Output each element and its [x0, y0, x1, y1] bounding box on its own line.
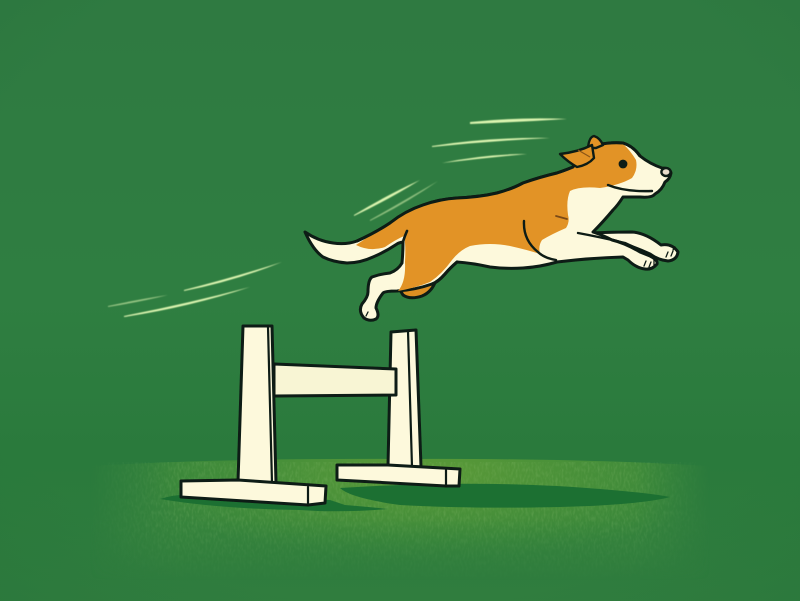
motion line	[354, 180, 420, 216]
illustration: dog jumping over agility hurdle	[108, 118, 682, 560]
hurdle	[181, 326, 460, 505]
motion line	[470, 118, 567, 124]
motion line	[184, 262, 282, 291]
dog: far hind leg	[400, 280, 436, 298]
ground: lit grass patch	[118, 458, 687, 560]
motion line	[108, 295, 168, 307]
dog: front ear	[560, 145, 594, 167]
hurdle: left post	[238, 326, 276, 483]
dog: belly outline	[432, 262, 457, 284]
dog: far front leg	[590, 232, 678, 261]
dog: eye	[619, 160, 627, 168]
dog: head outline	[590, 143, 640, 156]
dog: ear fold	[578, 150, 590, 157]
hurdle: right post	[388, 330, 421, 467]
dog: elbow line	[524, 221, 556, 260]
motion line	[124, 287, 250, 317]
dog: chest crease	[556, 216, 567, 219]
dog: foreleg crease	[578, 233, 650, 256]
motion line	[432, 138, 550, 147]
dog: mouth	[608, 185, 652, 191]
motion lines	[108, 118, 567, 317]
hurdle: crossbar	[274, 364, 396, 396]
hurdle: left foot	[181, 480, 326, 505]
dog: back ear	[588, 136, 603, 148]
dog: hip line	[403, 231, 407, 242]
motion line	[370, 181, 438, 221]
hurdle: right foot	[337, 465, 460, 486]
dog: body silhouette	[305, 143, 671, 320]
dog: nose	[661, 168, 671, 176]
motion line	[442, 154, 527, 163]
dog: top outline	[357, 167, 573, 241]
ground shadow	[160, 484, 670, 511]
dog: orange coat	[356, 144, 636, 291]
dog	[305, 136, 678, 320]
dog: toe marks	[366, 247, 675, 316]
